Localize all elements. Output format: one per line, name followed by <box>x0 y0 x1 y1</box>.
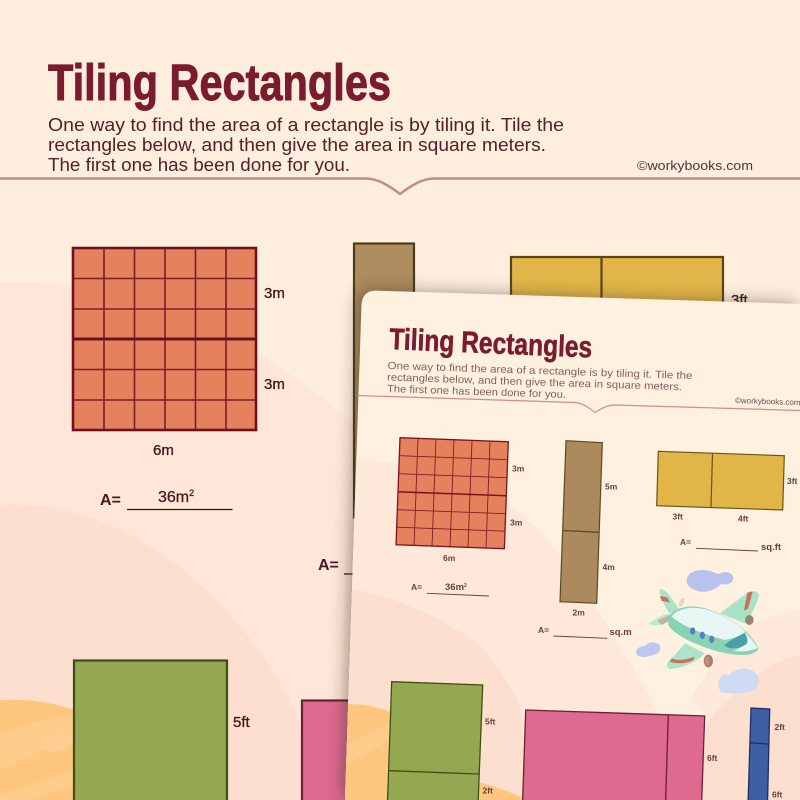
worksheet yellow labels: 3ft <box>787 476 798 486</box>
worksheet yellow labels <box>672 476 798 524</box>
second area answer: A= <box>318 557 339 574</box>
plane windows <box>690 627 695 635</box>
cloud <box>687 570 733 592</box>
cloud <box>718 668 759 693</box>
worksheet green labels: 5ft <box>485 716 496 726</box>
yellow rectangle <box>511 257 723 317</box>
worksheet brown answer: sq.m <box>610 627 632 638</box>
orange tiled square <box>73 248 256 430</box>
worksheet copyright: ©workybooks.com <box>735 396 800 407</box>
label 6m: 6m <box>153 442 174 459</box>
worksheet green labels: 2ft <box>482 786 493 796</box>
cloud <box>636 642 660 657</box>
plane engine <box>704 655 713 667</box>
worksheet blue rectangle <box>748 708 770 800</box>
instructions text: rectangles below, and then give the area in square meters. <box>48 135 546 155</box>
plane far engine <box>745 615 754 625</box>
area answer: A= <box>100 492 121 509</box>
worksheet brown answer: A= <box>538 625 549 635</box>
worksheet divider <box>357 396 800 412</box>
worksheet brown rectangle <box>560 441 602 603</box>
worksheet background hills <box>340 457 800 800</box>
worksheet brown labels: 5m <box>605 482 618 492</box>
area answer <box>100 488 232 510</box>
worksheet yellow answer: sq.ft <box>761 542 782 553</box>
plane tail <box>660 589 678 613</box>
worksheet yellow answer <box>680 537 782 553</box>
worksheet brown labels <box>572 482 618 618</box>
plane tail fin <box>678 598 685 607</box>
instructions text <box>48 115 564 175</box>
worksheet pink rectangle <box>522 710 705 800</box>
label 5ft: 5ft <box>233 714 251 731</box>
brown rectangle <box>354 244 414 518</box>
plane far wing <box>720 591 759 623</box>
worksheet yellow rectangle <box>657 451 784 510</box>
worksheet preview panel <box>340 291 800 800</box>
worksheet blue labels: 6ft <box>772 790 783 800</box>
worksheet green labels <box>482 716 496 796</box>
instructions text: The first one has been done for you. <box>48 155 350 175</box>
plane cockpit <box>724 633 747 648</box>
worksheet green rectangle <box>388 682 483 800</box>
instructions text: One way to find the area of a rectangle is by tiling it. Tile the <box>48 115 564 135</box>
worksheet blue labels: 2ft <box>774 722 785 732</box>
worksheet yellow labels: 4ft <box>738 514 749 524</box>
worksheet orange labels: 3m <box>512 464 525 474</box>
worksheet title: Tiling Rectangles <box>389 323 593 364</box>
label 3m: 3m <box>264 285 285 302</box>
area answer: 36m <box>158 489 189 506</box>
worksheet brown labels: 2m <box>572 608 585 618</box>
worksheet first answer: 36m <box>445 582 464 593</box>
green rectangle <box>74 660 227 800</box>
plane fuselage <box>668 607 758 655</box>
worksheet yellow answer: A= <box>680 537 691 547</box>
label 3m: 3m <box>264 376 285 393</box>
icon: airplane and clouds <box>636 570 759 693</box>
worksheet orange labels: 3m <box>510 518 523 528</box>
title: Tiling Rectangles <box>48 54 391 111</box>
worksheet pink label: 6ft <box>707 753 718 763</box>
worksheet orange labels: 6m <box>443 553 456 563</box>
worksheet brown answer <box>538 625 632 638</box>
pink rectangle <box>302 700 382 800</box>
worksheet first answer: 2 <box>464 583 467 589</box>
worksheet orange tiled square <box>396 438 508 549</box>
worksheet first answer <box>411 582 489 596</box>
area answer: 2 <box>189 488 194 498</box>
worksheet instructions: The first one has been done for you. <box>387 383 566 401</box>
worksheet orange labels <box>443 464 525 563</box>
worksheet blue labels <box>772 722 785 800</box>
worksheet brown labels: 4m <box>602 562 615 572</box>
second area answer <box>318 557 370 574</box>
label 3ft: 3ft <box>731 292 749 309</box>
copyright: ©workybooks.com <box>637 158 753 173</box>
header divider <box>0 178 800 194</box>
worksheet instructions: One way to find the area of a rectangle is by tiling it. Tile the <box>387 360 693 382</box>
worksheet first answer: A= <box>411 582 422 592</box>
plane near wing <box>667 643 705 669</box>
worksheet instructions <box>387 360 693 401</box>
plane stabilizer <box>648 614 672 625</box>
worksheet instructions: rectangles below, and then give the area in square meters. <box>387 372 682 393</box>
worksheet yellow labels: 3ft <box>672 512 683 522</box>
